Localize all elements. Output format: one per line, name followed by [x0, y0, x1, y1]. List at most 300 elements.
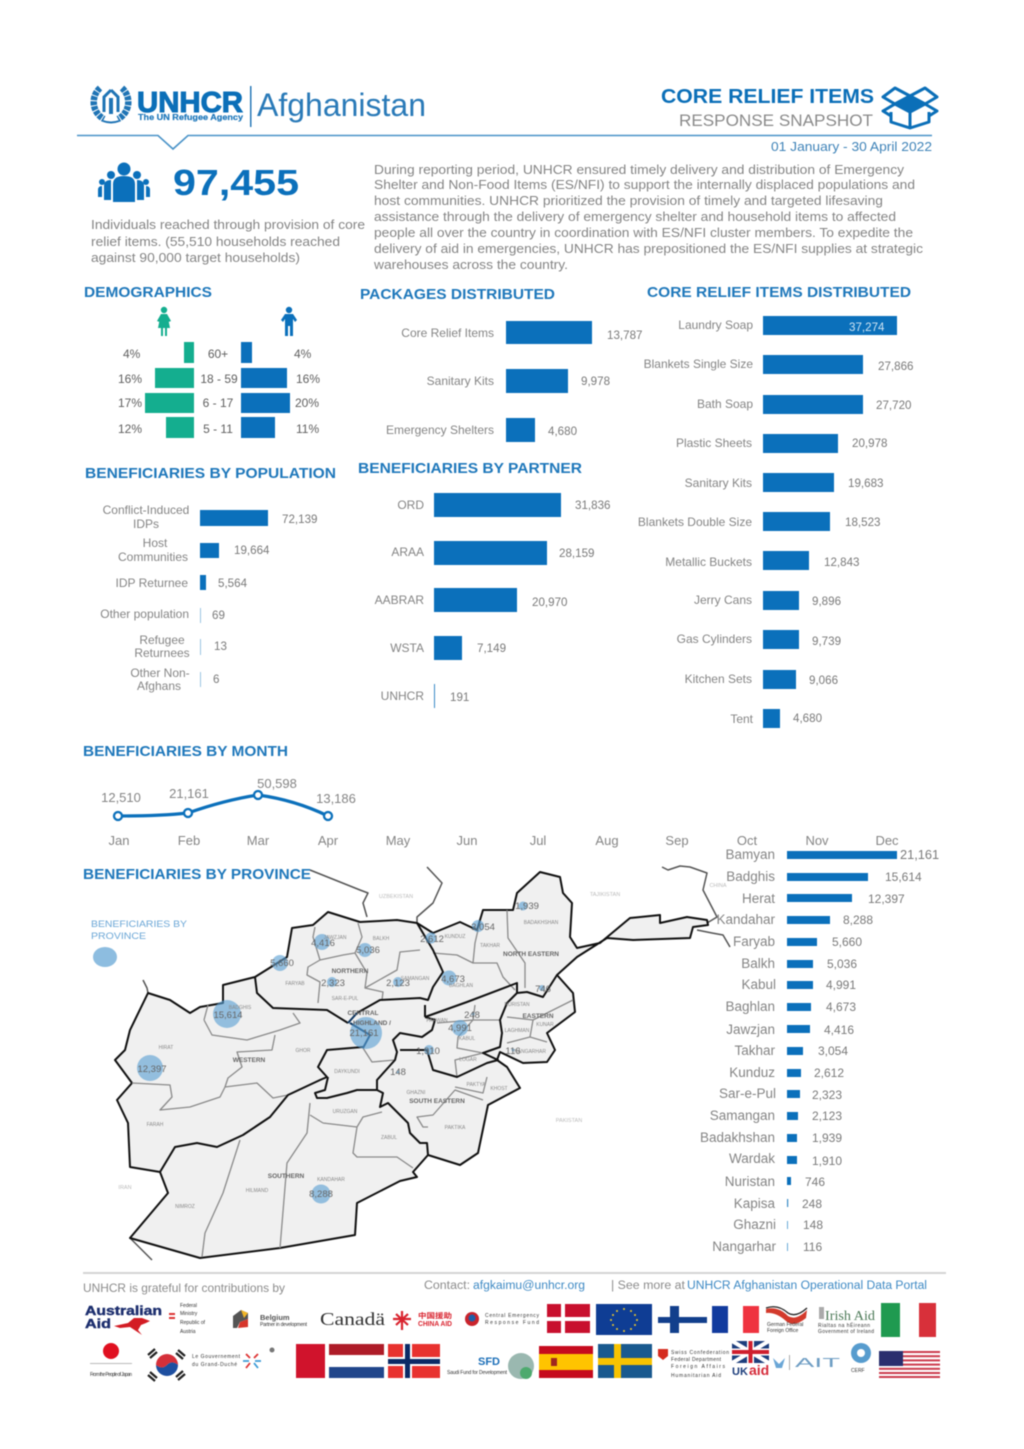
bar chart: 4,680 [548, 425, 577, 438]
province names: URUZGAN [333, 1109, 358, 1115]
map legend [91, 919, 188, 967]
province names: HIRAT [159, 1045, 173, 1051]
bar chart: 31,836 [575, 499, 610, 512]
country title: Afghanistan [257, 87, 426, 123]
line chart: Mar [247, 833, 270, 848]
logo: Saudi Fund for Development [447, 1353, 534, 1379]
logo: Saudi Fund for Development: SFD [478, 1356, 500, 1368]
province names: LAGHMAN [505, 1028, 530, 1034]
bar chart: Communities [118, 550, 188, 564]
region names: SOUTHERN [268, 1173, 305, 1180]
flag: Italy [881, 1303, 936, 1337]
map: beneficiaries by province [115, 866, 730, 1260]
bar chart: IDPs [133, 517, 159, 531]
country outline and regions [115, 872, 708, 1258]
bubble values: 4,416 [311, 938, 335, 949]
flag: Norway [388, 1344, 440, 1378]
heading: PACKAGES DISTRIBUTED [360, 286, 555, 303]
bar chart: beneficiaries by province: Badghis [726, 869, 775, 884]
province names: KHOST [490, 1086, 508, 1092]
bar chart: beneficiaries by province: 2,123 [812, 1109, 842, 1123]
bar chart: 9,978 [581, 375, 610, 388]
province names: BADAKHSHAN [524, 920, 559, 926]
bar chart: Other Non- [130, 666, 190, 680]
line chart: 21,161 [169, 786, 209, 801]
bar chart: Gas Cylinders [677, 632, 752, 646]
logo: Luxembourg: Le Gouvernement [192, 1354, 241, 1360]
logo: Irish Aid: Government of Ireland [818, 1329, 874, 1335]
bar chart: beneficiaries by province: Kunduz [729, 1065, 775, 1080]
flag: European Union [596, 1304, 652, 1335]
bar chart: ORD [397, 498, 424, 512]
bubble values: 5,660 [270, 958, 294, 969]
bar chart: beneficiaries by province: 116 [803, 1240, 822, 1254]
heading: BENEFICIARIES BY POPULATION [85, 465, 336, 482]
bar chart: beneficiaries by province: 2,323 [812, 1088, 842, 1102]
province names: TAKHAR [480, 943, 500, 949]
caption [91, 218, 365, 265]
bar chart: beneficiaries by province: Jawzjan [726, 1022, 775, 1037]
panel: core relief items distributed [638, 284, 913, 728]
province names: BADGHIS [229, 1005, 252, 1011]
bar chart: beneficiaries by province: Nuristan [725, 1174, 775, 1189]
bar chart: Sanitary Kits [427, 374, 494, 388]
neighbouring borders [130, 866, 730, 1260]
bar chart: 9,066 [809, 674, 838, 687]
bar chart: 7,149 [477, 642, 506, 655]
bar chart: beneficiaries by province: Badakhshan [700, 1130, 775, 1145]
footer: contact [424, 1280, 927, 1292]
caption: against 90,000 target households) [91, 251, 300, 265]
province names: SAR-E-PUL [332, 996, 359, 1002]
logo: Austria: Federal [180, 1303, 197, 1309]
logo: Germany [766, 1307, 807, 1334]
region names: SOUTH EASTERN [409, 1098, 465, 1105]
logo: Switzerland: Swiss Confederation [671, 1350, 729, 1356]
bar chart: beneficiaries by province: 3,054 [818, 1044, 848, 1058]
icon: UNHCR emblem [94, 88, 128, 122]
bar chart: beneficiaries by province: Kapisa [734, 1196, 775, 1211]
logo: Australian Aid [85, 1303, 162, 1335]
logo: UN: CERF [851, 1368, 865, 1374]
population pyramid: 12% [118, 422, 142, 436]
bar chart: Conflict-Induced [103, 503, 189, 517]
bar chart: beneficiaries by province: Kabul [741, 977, 776, 992]
bar chart: beneficiaries by province: Balkh [741, 956, 775, 971]
province names: PAKTIKA [445, 1125, 466, 1131]
footer rule [83, 1272, 946, 1274]
icon: female [157, 307, 171, 336]
footer: contact: Contact: [424, 1280, 470, 1292]
population pyramid [118, 342, 320, 438]
bar chart: beneficiaries by province: Nangarhar [712, 1239, 776, 1254]
bubble values: 3,054 [471, 922, 495, 933]
province names: JAWZJAN [324, 935, 347, 941]
logo: Austria: Republic of [180, 1320, 206, 1326]
bubble values: 8,288 [309, 1189, 333, 1200]
logo: Irish Aid: Irish Aid [825, 1309, 875, 1324]
bar chart: Emergency Shelters [386, 423, 494, 437]
logo: UK aid: aid [749, 1362, 769, 1378]
bar chart: beneficiaries by province: 248 [802, 1197, 822, 1211]
bar chart: Refugee [139, 633, 185, 647]
logo: Irish Aid [818, 1307, 875, 1335]
bar chart: 9,896 [812, 595, 841, 608]
province names: SAMANGAN [401, 976, 430, 982]
bar chart: beneficiaries by province [700, 847, 939, 1254]
bar chart: IDP Returnee [116, 576, 188, 590]
province names: HILMAND [246, 1188, 269, 1194]
bubble values: 5,036 [356, 945, 380, 956]
panel: beneficiaries by population [85, 465, 336, 693]
panel: beneficiaries by month [83, 743, 899, 848]
province names: PAKTYA [466, 1082, 486, 1088]
intro paragraph: During reporting period, UNHCR ensured timely delivery and distribution of Emergency [374, 163, 905, 177]
panel: packages distributed [360, 286, 642, 442]
population pyramid: 60+ [208, 347, 228, 361]
neighbouring country names [118, 883, 727, 1191]
bubble values: 4,991 [448, 1023, 472, 1034]
province boundaries [132, 910, 573, 1257]
logo: Switzerland: Humanitarian Aid [671, 1373, 721, 1379]
line chart: Sep [665, 833, 689, 848]
province names: KUNAR [536, 1022, 554, 1028]
bar chart: Afghans [137, 679, 181, 693]
logo: Japan [90, 1343, 132, 1378]
neighbouring country names: CHINA [709, 883, 727, 889]
province names: PARWAN [426, 1018, 448, 1024]
flag: Finland [658, 1306, 707, 1333]
donor logos: second row [90, 1341, 940, 1381]
logo: Australian Aid: Aid [85, 1316, 111, 1331]
bar chart [638, 316, 913, 728]
bar chart: 37,274 [849, 321, 885, 334]
region names: NORTHERN [332, 968, 369, 975]
neighbouring country names: IRAN [118, 1185, 132, 1191]
logo: CERF: Response Fund [485, 1320, 539, 1326]
bubble values: 4,673 [441, 974, 465, 985]
bar chart: beneficiaries by province: Kandahar [716, 912, 775, 927]
bubble values [137, 901, 551, 1200]
intro paragraph: warehouses across the country. [373, 258, 568, 272]
icon: group of people [98, 162, 150, 202]
bar chart: beneficiaries by province: Bamyan [725, 847, 775, 862]
bar chart [100, 503, 317, 693]
bubble values: 2,123 [386, 978, 410, 989]
header rule with notch [77, 136, 932, 149]
bar chart: 5,564 [218, 577, 248, 590]
region names: NORTH EASTERN [503, 951, 559, 958]
bar chart: 18,523 [845, 516, 880, 529]
bar chart: Jerry Cans [694, 593, 752, 607]
region names: EASTERN [522, 1013, 554, 1020]
bar chart: Kitchen Sets [685, 672, 752, 686]
bar chart [386, 321, 642, 442]
province names: NURISTAN [504, 1002, 530, 1008]
population pyramid: 20% [295, 396, 319, 410]
flag: Spain [539, 1346, 593, 1378]
header: UNHCR logo and country title [94, 86, 426, 127]
region names: CENTRAL [347, 1010, 379, 1017]
regional boundaries [160, 923, 557, 1172]
intro paragraph: people all over the country in coordination with ES/NFI cluster members. To expedite the [374, 226, 913, 240]
bar chart: beneficiaries by province: 148 [803, 1218, 823, 1232]
bar chart: UNHCR [381, 689, 424, 703]
province names: FARYAB [285, 981, 305, 987]
icon: open box [883, 88, 937, 128]
bar chart: Plastic Sheets [676, 436, 752, 450]
bar chart: Laundry Soap [678, 318, 753, 332]
flag: France [712, 1306, 759, 1333]
logo: Belgium [233, 1310, 308, 1328]
region names [233, 951, 559, 1180]
province names: KABUL [459, 1036, 475, 1042]
heading: CORE RELIEF ITEMS DISTRIBUTED [647, 284, 911, 301]
bar chart: Core Relief Items [401, 326, 494, 340]
province names: KUNDUZ [445, 934, 465, 940]
bubble values: 746 [535, 984, 551, 995]
bar chart: 4,680 [793, 712, 822, 725]
bar chart: 12,843 [824, 556, 859, 569]
intro paragraph: host communities. UNHCR prioritized the provision of timely and targeted lifesaving [374, 194, 883, 208]
bar chart: 191 [450, 691, 469, 704]
proportional bubbles [137, 902, 545, 1204]
line chart: Feb [178, 833, 200, 848]
bar chart: 6 [213, 673, 219, 686]
logo: Australian Aid: Australian [85, 1303, 162, 1318]
bar chart: AABRAR [375, 593, 424, 607]
bar chart: Host [143, 536, 168, 550]
logo: China aid [393, 1311, 452, 1330]
bar chart: beneficiaries by province: Samangan [710, 1108, 775, 1123]
bar chart: 13,787 [607, 329, 642, 342]
logo: Republic of Korea [148, 1349, 185, 1381]
neighbouring country names: PAKISTAN [556, 1118, 582, 1124]
population pyramid: 16% [296, 372, 320, 386]
heading: BENEFICIARIES BY PARTNER [358, 460, 582, 477]
bar chart: beneficiaries by province: 1,910 [812, 1154, 842, 1168]
bar chart: beneficiaries by province: 5,660 [832, 935, 862, 949]
province names: ZABUL [381, 1135, 397, 1141]
bubble values: 116 [505, 1046, 521, 1057]
province names: GHOR [296, 1048, 311, 1054]
flag: red block [296, 1344, 325, 1378]
bar chart: beneficiaries by province: Faryab [733, 934, 775, 949]
line chart: Apr [318, 833, 339, 848]
bar chart: beneficiaries by province: Wardak [729, 1151, 775, 1166]
bar chart: beneficiaries by province: 5,036 [827, 957, 857, 971]
bar chart: Metallic Buckets [665, 555, 752, 569]
caption: Individuals reached through provision of core [91, 218, 365, 232]
line chart: Aug [595, 833, 619, 848]
province names: NANGARHAR [514, 1049, 546, 1055]
intro paragraph: Shelter and Non-Food Items (ES/NFI) to support the internally displaced populations and [374, 178, 915, 192]
logo: aid agency wordmark [773, 1355, 840, 1370]
province names: FARAH [147, 1122, 164, 1128]
bar chart: Sanitary Kits [685, 476, 752, 490]
population pyramid: 5 - 11 [203, 422, 233, 436]
footer: contact: UNHCR Afghanistan Operational Data Portal [687, 1280, 927, 1292]
bar chart: beneficiaries by province: Takhar [734, 1043, 775, 1058]
bubble values: 2,612 [420, 934, 444, 945]
bar chart: Blankets Double Size [638, 515, 752, 529]
heading: DEMOGRAPHICS [84, 284, 212, 301]
bar chart: beneficiaries by province: Baghlan [725, 999, 775, 1014]
bubble values: 248 [464, 1010, 480, 1021]
bar chart: WSTA [390, 641, 424, 655]
bar chart: ARAA [391, 545, 424, 559]
logo: Austria: Ministry [180, 1311, 198, 1317]
logo: Belgium: Belgium [260, 1313, 290, 1322]
bar chart: beneficiaries by province: 4,673 [826, 1000, 856, 1014]
bar chart: 9,739 [812, 635, 841, 648]
date range: 01 January - 30 April 2022 [771, 139, 932, 154]
line chart: Jun [457, 833, 477, 848]
line chart [101, 776, 899, 848]
logo: UK aid: UK [732, 1366, 748, 1378]
bar chart: Tent [730, 712, 754, 726]
bar chart: beneficiaries by province: Sar-e-Pul [719, 1086, 776, 1101]
bar chart: beneficiaries by province: 4,416 [824, 1023, 854, 1037]
line chart: Nov [805, 833, 829, 848]
logo: CERF: Central Emergency [485, 1313, 540, 1319]
logo: aid agency wordmark: AIT [795, 1355, 840, 1370]
heading: BENEFICIARIES BY MONTH [83, 743, 288, 760]
key figure: individuals reached [91, 162, 365, 265]
bar chart: 69 [212, 609, 225, 622]
footer: contact: | See more at [611, 1280, 686, 1292]
province names: DAYKUNDI [334, 1069, 360, 1075]
map legend: BENEFICIARIES BY [91, 919, 188, 930]
logo: Switzerland: Foreign Affairs [671, 1364, 726, 1370]
logo: Germany: Foreign Office [767, 1328, 799, 1334]
bubble values: 15,614 [213, 1010, 243, 1021]
logo: Austria [169, 1303, 206, 1335]
bar chart: beneficiaries by province: 4,991 [826, 978, 856, 992]
logo: Belgium: Partner in development [260, 1322, 308, 1328]
province names: NIMROZ [175, 1204, 195, 1210]
flag: Sweden [598, 1344, 652, 1378]
bar chart: beneficiaries by province: 2,612 [814, 1066, 844, 1080]
province names: KANDAHAR [317, 1177, 345, 1183]
donor logos: first row [85, 1303, 936, 1337]
logo: UK aid [732, 1341, 769, 1378]
icon: male [281, 307, 297, 336]
line chart: Jan [109, 833, 129, 848]
line chart: May [386, 833, 411, 848]
logo: Luxembourg [192, 1348, 274, 1368]
logo: Canada: Canadä [320, 1309, 385, 1329]
logo: CERF [465, 1312, 540, 1326]
bubble values: 148 [390, 1067, 406, 1078]
province names [147, 920, 559, 1210]
heading: beneficiaries by province: BENEFICIARIES BY PROVINCE [83, 866, 311, 883]
bubble values: 21,161 [349, 1028, 379, 1039]
panel: beneficiaries by partner [358, 460, 610, 708]
logo: Germany: German Federal [767, 1322, 803, 1328]
intro paragraph [373, 163, 923, 272]
neighbouring country names: UZBEKISTAN [379, 894, 413, 900]
bar chart: beneficiaries by province: Herat [742, 891, 775, 906]
bar chart: 20,970 [532, 596, 567, 609]
logo: UN [851, 1343, 871, 1374]
bubble values: 1,910 [416, 1046, 440, 1057]
population pyramid: 16% [118, 372, 142, 386]
bar chart: 27,866 [878, 360, 913, 373]
bar chart: 20,978 [852, 437, 887, 450]
logotype: UNHCR [137, 87, 243, 119]
province names: GHAZNI [407, 1090, 425, 1096]
caption: relief items. (55,510 households reached [91, 235, 340, 249]
bar chart: 13 [214, 640, 227, 653]
bar chart: beneficiaries by province: 746 [805, 1175, 825, 1189]
bar chart: beneficiaries by province: 21,161 [900, 847, 939, 862]
bar chart: Blankets Single Size [644, 357, 753, 371]
line chart: Oct [737, 833, 757, 848]
number: 97,455 [173, 162, 299, 203]
population pyramid: 18 - 59 [200, 372, 238, 386]
neighbouring country names: TAJIKISTAN [590, 892, 620, 898]
population pyramid: 17% [118, 396, 142, 410]
line chart: Jul [530, 833, 546, 848]
bar chart: 19,683 [848, 477, 883, 490]
logo: China aid: CHINA AID [418, 1321, 452, 1328]
flag: United States [879, 1351, 940, 1378]
logo: Saudi Fund for Development: Saudi Fund for Development [447, 1370, 508, 1376]
bar chart: Other population [100, 607, 189, 621]
population pyramid: 4% [123, 347, 141, 361]
intro paragraph: delivery of aid in emergencies, UNHCR has prepositioned the ES/NFI supplies at strategic [374, 242, 923, 256]
region names: HIGHLAND / [353, 1020, 391, 1027]
bar chart: beneficiaries by province: 12,397 [868, 892, 905, 906]
footer: contact: afgkaimu@unhcr.org [473, 1280, 585, 1292]
bar chart: beneficiaries by province: 1,939 [812, 1131, 842, 1145]
logo: China aid: 中国援助 [418, 1311, 452, 1320]
logotype: The UN Refugee Agency [138, 113, 244, 122]
logo: Switzerland: Federal Department [671, 1357, 722, 1363]
population pyramid: 11% [296, 422, 319, 436]
bar chart [375, 493, 610, 708]
panel: demographics [84, 284, 320, 438]
province names: BALKH [373, 936, 390, 942]
flag: Denmark [547, 1304, 590, 1333]
bar chart: Bath Soap [697, 397, 753, 411]
region names: WESTERN [233, 1057, 266, 1064]
logo: Japan: From the People of Japan [90, 1372, 132, 1378]
bar chart: beneficiaries by province: 15,614 [885, 870, 922, 884]
header: report title [661, 86, 874, 130]
bubble values: 12,397 [137, 1064, 167, 1075]
bubble values: 1,939 [515, 901, 539, 912]
line chart: Dec [875, 833, 899, 848]
bubble values: 2,323 [321, 978, 345, 989]
intro paragraph: assistance through the delivery of emergency shelter and household items to affected [374, 210, 896, 224]
logo: Luxembourg: du Grand-Duché [192, 1362, 237, 1368]
logo: Austria: Austria [180, 1329, 196, 1335]
bar chart: Returnees [134, 646, 190, 660]
bar chart: beneficiaries by province: Ghazni [733, 1217, 776, 1232]
logo: Switzerland [658, 1349, 729, 1379]
bar chart: 28,159 [559, 547, 594, 560]
header: report title: RESPONSE SNAPSHOT [679, 111, 873, 130]
population pyramid: 4% [294, 347, 312, 361]
header: report title: CORE RELIEF ITEMS [661, 86, 874, 108]
map legend: PROVINCE [91, 931, 146, 942]
line chart: 12,510 [101, 790, 141, 805]
bar chart: 19,664 [234, 544, 270, 557]
bar chart: 27,720 [876, 399, 911, 412]
line chart: 13,186 [316, 791, 356, 806]
